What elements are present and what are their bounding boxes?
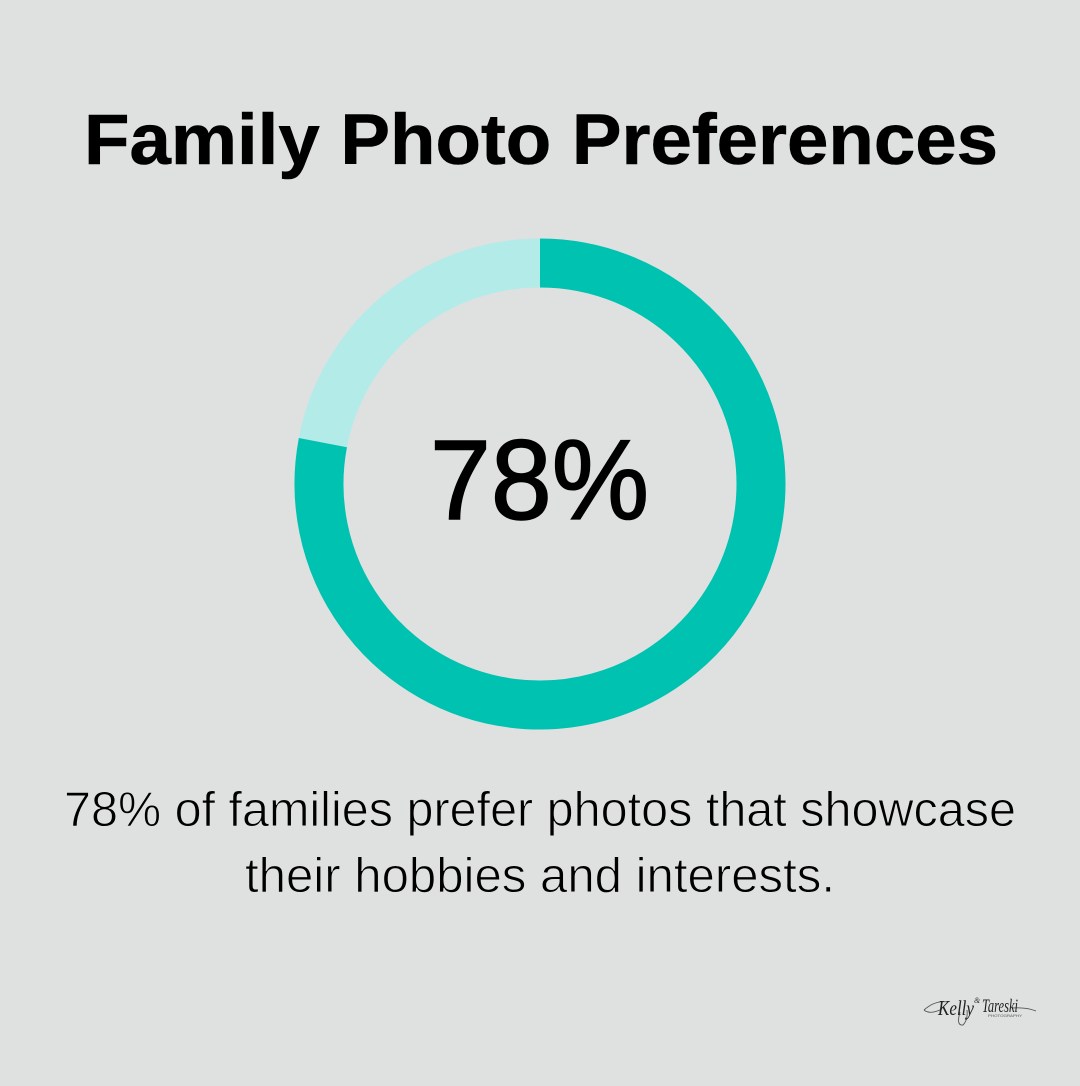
signature logo: Tareski (982, 996, 1018, 1017)
title: Family Photo Preferences (84, 101, 998, 180)
signature logo: & (974, 996, 981, 1005)
donut chart: 78 percent (319, 263, 761, 705)
signature logo: Kelly (937, 996, 975, 1020)
signature logo: PHOTOGRAPHY (988, 1014, 1023, 1018)
description text (64, 783, 1016, 903)
78 percent arc (319, 263, 761, 705)
description text: 78% of families prefer photos that showcase (64, 783, 1016, 837)
description text: their hobbies and interests. (245, 849, 835, 903)
remaining 22 percent arc (323, 263, 540, 443)
center value: 78% (430, 417, 649, 543)
signature logo (924, 996, 1036, 1025)
